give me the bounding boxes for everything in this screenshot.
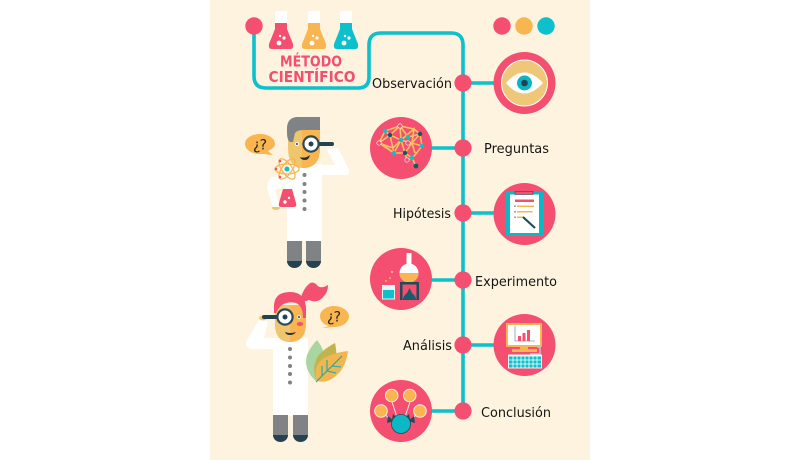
buttons	[288, 347, 292, 384]
title: CIENTÍFICO	[268, 67, 356, 86]
buttons	[302, 173, 306, 211]
coat and arms	[246, 318, 308, 416]
magnifier	[262, 309, 293, 325]
leaves	[306, 340, 348, 382]
head	[288, 128, 320, 168]
title start dot	[245, 17, 263, 35]
timeline connector	[254, 26, 525, 411]
hair	[287, 117, 320, 142]
title	[268, 52, 356, 86]
hand: raised	[259, 316, 267, 320]
speech bubble: female	[320, 306, 349, 328]
legs and shoes	[273, 415, 308, 442]
icon: three flasks	[269, 11, 358, 49]
hand: left	[272, 206, 280, 210]
speech bubble: male: ¿?	[253, 138, 267, 154]
decorative colour dots	[493, 17, 555, 35]
head	[275, 305, 306, 342]
icon: brain network	[370, 117, 432, 179]
speech bubble: female: ¿?	[327, 310, 341, 326]
icon: chemistry lab	[370, 248, 432, 310]
step label: Observación: Observación	[372, 76, 452, 92]
character: male scientist	[245, 117, 349, 268]
flask	[279, 181, 296, 207]
icon: computer	[494, 314, 556, 376]
icon: eye	[494, 52, 556, 114]
step label: Preguntas: Preguntas	[484, 141, 549, 157]
hair	[274, 292, 306, 318]
icon: conclusion network	[370, 380, 432, 442]
magnifier	[303, 136, 334, 152]
legs and shoes	[287, 241, 321, 268]
face	[297, 315, 301, 319]
step label: Conclusión: Conclusión	[481, 405, 551, 421]
eye, mouth	[295, 142, 299, 146]
character: female scientist	[246, 282, 349, 442]
atom	[275, 156, 299, 182]
step label: Experimento: Experimento	[475, 274, 557, 290]
speech bubble: male	[245, 134, 275, 155]
step label: Hipótesis: Hipótesis	[393, 206, 451, 222]
step nodes	[454, 74, 472, 420]
icon: clipboard	[494, 183, 556, 245]
step label: Análisis: Análisis	[403, 338, 452, 354]
ponytail	[301, 282, 328, 302]
coat and arms	[267, 148, 349, 242]
background panel	[210, 0, 590, 460]
title: MÉTODO	[280, 52, 342, 70]
